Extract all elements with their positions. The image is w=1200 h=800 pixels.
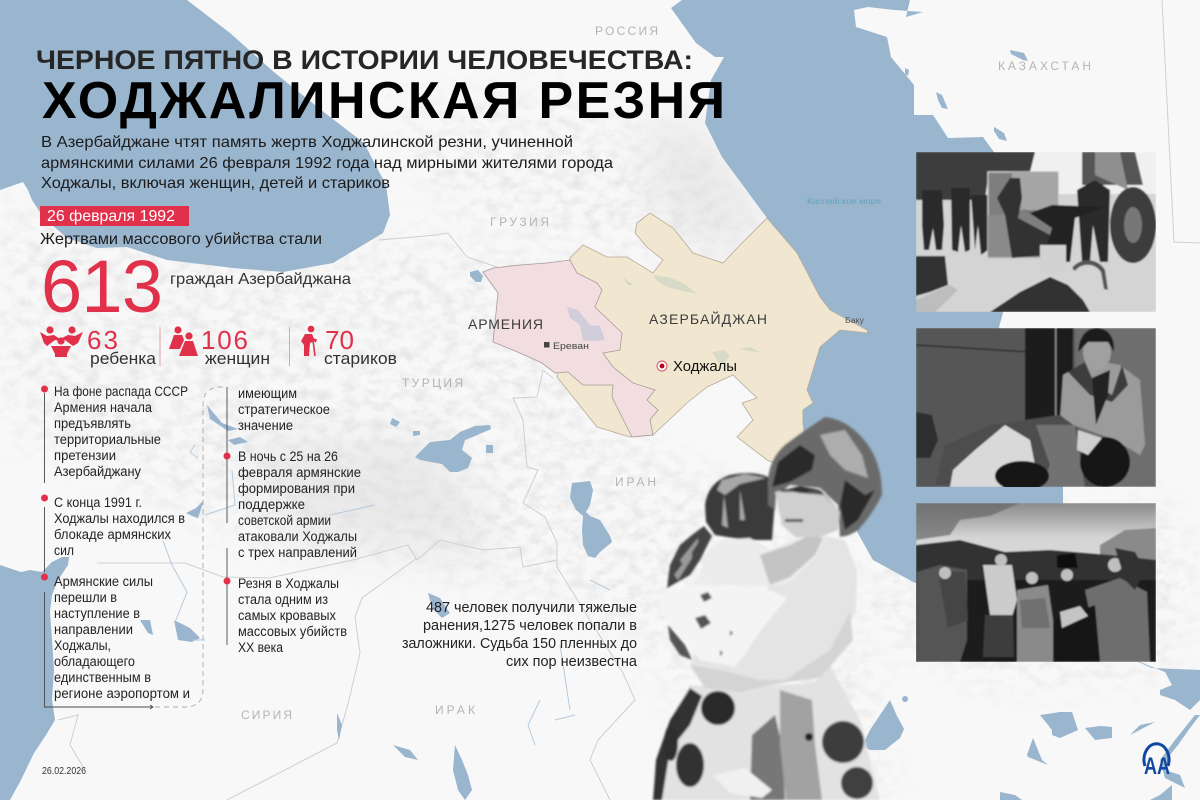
- stat: 106 women: 106: [201, 325, 248, 355]
- date badge: 26 февраля 1992: [47, 208, 175, 225]
- map labels: ИРАН: [615, 475, 656, 489]
- map labels: КАЗАХСТАН: [998, 59, 1091, 73]
- map labels: Каспийское море: [807, 196, 881, 206]
- title line 2: ХОДЖАЛИНСКАЯ РЕЗНЯ: [42, 72, 725, 130]
- text block: column 2: [238, 386, 361, 655]
- stat: 70 elderly: [324, 325, 397, 368]
- child's back and arm: [697, 536, 826, 587]
- stat: 63 children: 63: [87, 325, 118, 355]
- map labels: [241, 24, 1091, 722]
- child's headscarf: [705, 473, 775, 540]
- text block: column 2: самых кровавых: [238, 608, 336, 623]
- text block: column 2: имеющим: [238, 386, 297, 401]
- callout: wounded and hostages: 487 человек получили тяжелые: [426, 600, 637, 616]
- text block: column 1: претензии: [54, 448, 116, 463]
- stat: 63 children: ребенка: [90, 349, 157, 368]
- text block: column 2: поддержке: [238, 497, 305, 512]
- text block: column 1: территориальные: [54, 432, 161, 447]
- icon: elderly: [301, 326, 316, 356]
- water: Mediterranean Sea: [0, 557, 69, 800]
- callout: wounded and hostages: [402, 600, 638, 670]
- country: Azerbaijan: [557, 213, 868, 470]
- map labels: СИРИЯ: [241, 708, 292, 722]
- stat: 70 elderly: стариков: [324, 349, 397, 368]
- text block: column 1: На фоне распада СССР: [54, 384, 188, 399]
- callout: wounded and hostages: заложники. Судьба 150 пленных до: [402, 636, 637, 652]
- text block: column 1: Ходжалы,: [54, 638, 111, 653]
- stat: 106 women: [201, 325, 270, 368]
- big number 613: 613: [41, 245, 163, 328]
- map labels: ИРАК: [435, 703, 475, 717]
- title line 1: ЧЕРНОЕ ПЯТНО В ИСТОРИИ ЧЕЛОВЕЧЕСТВА:: [36, 45, 693, 75]
- timeline: [41, 386, 230, 709]
- child's scarf tail: [667, 526, 712, 588]
- text block: column 1: единственным в: [54, 670, 151, 685]
- map labels: Ереван: [553, 341, 589, 352]
- text block: column 2: советской армии: [238, 513, 331, 528]
- photo: grieving crowd: [916, 503, 1156, 662]
- stat: 106 women: женщин: [205, 349, 270, 368]
- country: Armenia: [483, 260, 658, 437]
- text block: column 1: наступление в: [54, 606, 140, 621]
- map labels: АЗЕРБАЙДЖАН: [649, 310, 767, 327]
- water: Caspian Sea: [671, 0, 1063, 583]
- stat: 63 children: [87, 325, 157, 368]
- text block: column 1: [54, 384, 190, 701]
- text block: column 1: Ходжалы находился в: [54, 511, 185, 526]
- map labels: ГРУЗИЯ: [490, 215, 549, 229]
- icon: AA logo: [1144, 744, 1170, 780]
- map labels: АРМЕНИЯ: [468, 316, 543, 332]
- intro text: Ходжалы, включая женщин, детей и стариков: [41, 175, 390, 192]
- text block: column 2: Резня в Ходжалы: [238, 576, 339, 591]
- text block: column 2: значение: [238, 418, 293, 433]
- text block: column 2: атаковали Ходжалы: [238, 529, 357, 544]
- skirt: [653, 665, 880, 800]
- marker: Khojaly: Ходжалы: [673, 358, 737, 375]
- callout: wounded and hostages: сих пор неизвестна: [506, 654, 638, 670]
- stat dividers: [160, 327, 290, 366]
- text block: column 1: обладающего: [54, 654, 135, 669]
- text block: column 1: направлении: [54, 622, 133, 637]
- text block: column 1: Армянские силы: [54, 574, 153, 589]
- text block: column 2: XX века: [238, 640, 283, 655]
- hat: [768, 417, 882, 537]
- Lake Sevan: [567, 307, 605, 341]
- date stamp: 26.02.2026: [42, 766, 86, 777]
- text block: column 1: Армения начала: [54, 400, 152, 415]
- text block: column 2: В ночь с 25 на 26: [238, 449, 338, 464]
- text block: column 1: предъявлять: [54, 416, 131, 431]
- text block: column 1: сил: [54, 543, 74, 558]
- text block: column 2: февраля армянские: [238, 465, 361, 480]
- water: Black Sea: [0, 0, 390, 272]
- intro text: В Азербайджане чтят память жертв Ходжалинской резни, учиненной: [41, 134, 573, 151]
- text block: column 1: блокаде армянских: [54, 527, 171, 542]
- text block: column 1: перешли в: [54, 590, 117, 605]
- text block: column 2: стратегическое: [238, 402, 330, 417]
- icon: children: [40, 326, 83, 357]
- intro text: [41, 134, 613, 192]
- map labels: Баку: [845, 316, 864, 325]
- text block: column 1: регионе аэропортом и: [54, 686, 190, 701]
- patterned blanket: [657, 585, 787, 667]
- photo: memorial gathering: [916, 152, 1156, 312]
- text block: column 2: с трех направлений: [238, 545, 357, 560]
- map labels: РОССИЯ: [595, 24, 658, 38]
- text block: column 2: стала одним из: [238, 592, 328, 607]
- stat: 70 elderly: 70: [325, 325, 354, 355]
- photo: man with bodies: [916, 328, 1156, 491]
- text block: column 2: массовых убийств: [238, 624, 347, 639]
- photo: girl holding child: [653, 417, 882, 800]
- text block: column 2: формирования при: [238, 481, 355, 496]
- face: [775, 487, 840, 537]
- text block: column 1: Азербайджану: [54, 464, 141, 479]
- sweater: [690, 535, 857, 692]
- map labels: ТУРЦИЯ: [402, 376, 463, 390]
- victims caption: граждан Азербайджана: [170, 271, 351, 288]
- intro text: армянскими силами 26 февраля 1992 года над мирными жителями города: [41, 155, 613, 172]
- icon: AA logo: AA: [1144, 753, 1170, 780]
- text block: column 1: С конца 1991 г.: [54, 495, 142, 510]
- icon: women: [169, 326, 198, 356]
- callout: wounded and hostages: ранения,1275 человек попали в: [423, 618, 637, 634]
- subheading: Жертвами массового убийства стали: [40, 231, 322, 248]
